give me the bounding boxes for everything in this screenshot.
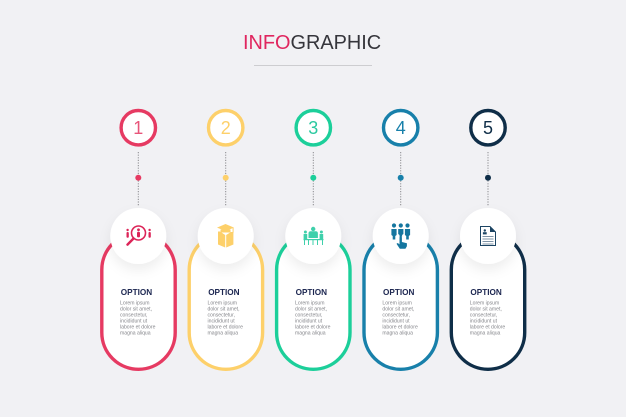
title: INFOGRAPHIC — [243, 32, 381, 54]
text block 2: labore et dolore — [208, 325, 243, 331]
number badge 2: 2 — [221, 118, 231, 138]
text block 1: OPTION — [121, 288, 152, 297]
icon: magnifier with people — [126, 226, 151, 245]
step 5 — [451, 110, 525, 369]
text block 3: labore et dolore — [295, 325, 331, 331]
number badge 2 — [208, 110, 243, 145]
text block 1: labore et dolore — [120, 325, 156, 331]
icon circle 5 — [460, 208, 516, 264]
icon: resume document — [480, 226, 496, 246]
text block 4: Lorem ipsum — [382, 301, 412, 307]
icon circle 3 — [285, 208, 341, 264]
number badge 4 — [384, 110, 418, 145]
icon: hand selecting person — [391, 223, 410, 249]
text block 5: dolor sit amet, — [470, 307, 502, 313]
number badge 3: 3 — [308, 118, 318, 138]
text block 5 — [470, 288, 505, 337]
text block 2: magna aliqua — [208, 331, 238, 337]
text block 5: OPTION — [470, 288, 502, 297]
text block 2: OPTION — [208, 288, 240, 297]
text block 4: OPTION — [383, 288, 414, 297]
text block 2: dolor sit amet, — [208, 307, 240, 313]
text block 4: labore et dolore — [382, 325, 418, 331]
text block 3: incididunt ut — [295, 319, 323, 325]
text block 4: consectetur, — [382, 313, 410, 319]
text block 3: dolor sit amet, — [295, 307, 327, 313]
panel 3 — [277, 208, 350, 369]
connector 3 — [310, 152, 316, 206]
text block 5: consectetur, — [470, 313, 497, 319]
icon circle 2 — [198, 208, 254, 264]
step 1 — [102, 110, 175, 369]
text block 5: incididunt ut — [470, 319, 498, 325]
text block 1: consectetur, — [120, 313, 147, 319]
panel 2 — [189, 208, 263, 369]
number badge 5: 5 — [483, 118, 493, 138]
text block 2: incididunt ut — [208, 319, 235, 325]
connector 5 — [485, 152, 491, 206]
text block 1: incididunt ut — [120, 319, 148, 325]
text block 4 — [382, 288, 418, 337]
text block 3: magna aliqua — [295, 331, 326, 337]
text block 1: magna aliqua — [120, 331, 151, 337]
connector 2 — [223, 152, 229, 206]
text block 5: labore et dolore — [470, 325, 505, 331]
number badge 3 — [296, 110, 330, 145]
number badge 1 — [121, 110, 156, 145]
icon: meeting group — [304, 227, 324, 245]
step 2 — [189, 110, 263, 369]
icon circle 1 — [110, 208, 166, 264]
step 4 — [364, 110, 437, 369]
panel 4 — [364, 208, 437, 369]
text block 4: magna aliqua — [382, 331, 413, 337]
text block 1: dolor sit amet, — [120, 307, 152, 313]
text block 2: consectetur, — [208, 313, 235, 319]
text block 1 — [120, 288, 156, 337]
panel 1 — [102, 208, 175, 369]
text block 2: Lorem ipsum — [208, 301, 237, 307]
panel 5 — [451, 208, 525, 369]
connector 1 — [135, 152, 141, 206]
number badge 1: 1 — [133, 118, 143, 138]
text block 4: dolor sit amet, — [382, 307, 414, 313]
number badge 4: 4 — [396, 118, 406, 138]
text block 3: Lorem ipsum — [295, 301, 324, 307]
text block 5: magna aliqua — [470, 331, 501, 337]
text block 1: Lorem ipsum — [120, 301, 149, 307]
connector 4 — [398, 152, 404, 206]
icon circle 4 — [373, 208, 429, 264]
text block 3: consectetur, — [295, 313, 322, 319]
number badge 5 — [471, 110, 505, 145]
step 3 — [277, 110, 350, 369]
text block 5: Lorem ipsum — [470, 301, 499, 307]
text block 2 — [208, 288, 243, 337]
icon: box with graduation cap — [217, 224, 234, 248]
text block 3 — [295, 288, 331, 337]
text block 4: incididunt ut — [382, 319, 410, 325]
text block 3: OPTION — [296, 288, 327, 297]
